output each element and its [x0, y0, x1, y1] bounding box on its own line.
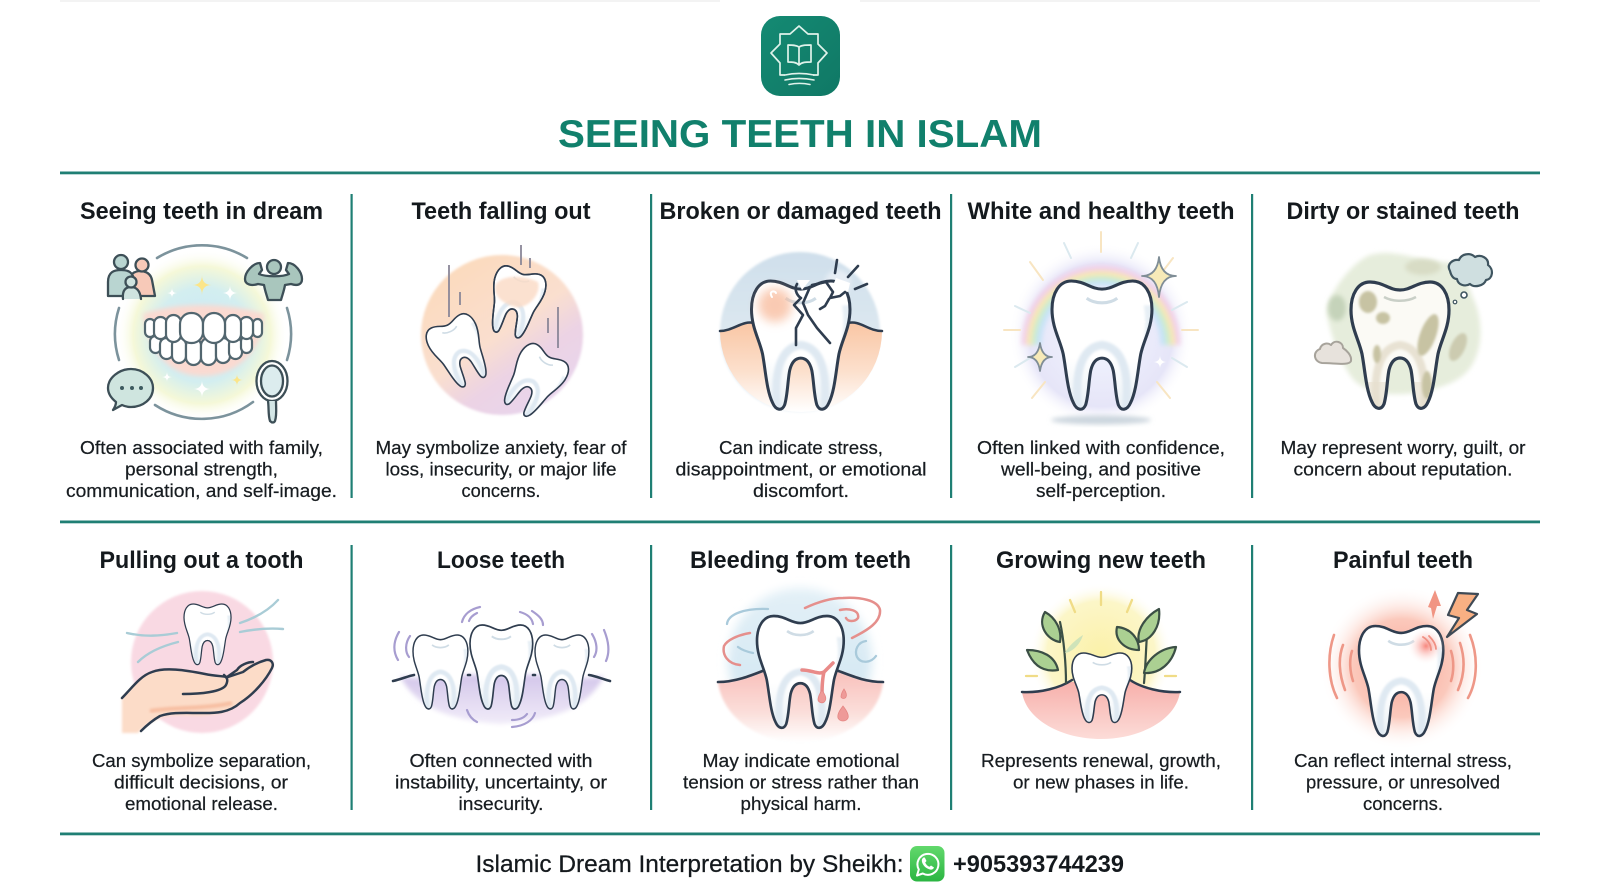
description: Can symbolize separation,: [92, 750, 311, 771]
description: [676, 437, 926, 501]
heading: Teeth falling out: [412, 198, 590, 225]
icon: row of loose teeth: [393, 607, 610, 727]
description: [981, 750, 1221, 792]
description: concerns.: [462, 480, 540, 501]
description: Represents renewal, growth,: [981, 750, 1221, 771]
icon: shining tooth with rainbow: [1004, 232, 1198, 427]
description: May represent worry, guilt, or: [1280, 437, 1526, 458]
heading: Growing new teeth: [996, 547, 1206, 574]
heading: Broken or damaged teeth: [660, 198, 942, 225]
description: [1280, 437, 1526, 480]
top divider: [60, 172, 1540, 174]
heading: Bleeding from teeth: [690, 547, 911, 574]
panel: teeth falling out: [376, 198, 627, 501]
bottom divider: [60, 832, 1540, 835]
description: [683, 750, 919, 814]
panel: white and healthy teeth: [968, 198, 1234, 501]
panel: bleeding from teeth: [683, 547, 919, 814]
heading: Loose teeth: [437, 547, 565, 574]
icon: whatsapp: [910, 846, 944, 882]
description: Often linked with confidence,: [977, 437, 1225, 458]
faint top edge band: [60, 0, 1540, 2]
icon: stained tooth with clouds: [1315, 253, 1492, 412]
description: [1294, 750, 1512, 814]
heading: Seeing teeth in dream: [80, 198, 323, 225]
description: or new phases in life.: [1013, 772, 1189, 792]
logo badge: [761, 16, 840, 96]
panel: loose teeth: [393, 547, 610, 814]
description: [395, 750, 607, 814]
icon: tooth above open hand: [122, 591, 283, 733]
panel: growing new teeth: [981, 547, 1221, 792]
description: loss, insecurity, or major life: [386, 458, 616, 480]
description: physical harm.: [740, 793, 862, 814]
description: May symbolize anxiety, fear of: [376, 437, 627, 458]
icon: painful tooth with lightning bolts: [1320, 586, 1484, 750]
description: emotional release.: [125, 793, 278, 814]
description: personal strength,: [125, 458, 278, 480]
description: Can indicate stress,: [719, 437, 883, 458]
description: tension or stress rather than: [683, 772, 919, 792]
icon: bleeding tooth: [718, 588, 883, 742]
description: communication, and self-image.: [66, 480, 337, 501]
description: Often associated with family,: [80, 437, 323, 458]
footer contact line: +905393744239: [953, 851, 1124, 878]
description: insecurity.: [458, 793, 544, 814]
footer contact line: Islamic Dream Interpretation by Sheikh:: [476, 851, 904, 878]
description: instability, uncertainty, or: [395, 772, 607, 792]
panel: painful teeth: [1294, 547, 1512, 814]
description: discomfort.: [753, 480, 849, 501]
description: pressure, or unresolved: [1306, 772, 1500, 792]
panel: dirty or stained teeth: [1280, 198, 1526, 480]
description: concerns.: [1363, 793, 1443, 814]
description: well-being, and positive: [1000, 458, 1201, 480]
heading: White and healthy teeth: [968, 198, 1234, 225]
heading: Pulling out a tooth: [100, 547, 304, 574]
icon: smile with family, strength, speech and mirror: [108, 245, 302, 422]
icon: new tooth between sprouting leaves: [1022, 583, 1180, 739]
description: Can reflect internal stress,: [1294, 750, 1512, 771]
column separators: [350, 194, 1253, 810]
middle divider: [60, 520, 1540, 523]
heading: Painful teeth: [1333, 547, 1473, 574]
icon: falling teeth: [421, 245, 583, 426]
icon: cracked tooth: [720, 252, 882, 413]
heading: Dirty or stained teeth: [1286, 198, 1520, 225]
description: [66, 437, 337, 501]
description: disappointment, or emotional: [676, 458, 926, 480]
description: [376, 437, 627, 501]
description: Often connected with: [410, 750, 592, 771]
description: self-perception.: [1036, 480, 1166, 501]
title: SEEING TEETH IN ISLAM: [558, 113, 1042, 156]
description: [92, 750, 311, 814]
description: [977, 437, 1225, 501]
description: concern about reputation.: [1294, 458, 1512, 480]
footer contact line: [476, 846, 1124, 882]
description: May indicate emotional: [702, 750, 900, 771]
panel: seeing teeth in dream: [66, 198, 337, 501]
panel: broken or damaged teeth: [660, 198, 942, 501]
panel: pulling out a tooth: [92, 547, 311, 814]
description: difficult decisions, or: [114, 772, 288, 792]
